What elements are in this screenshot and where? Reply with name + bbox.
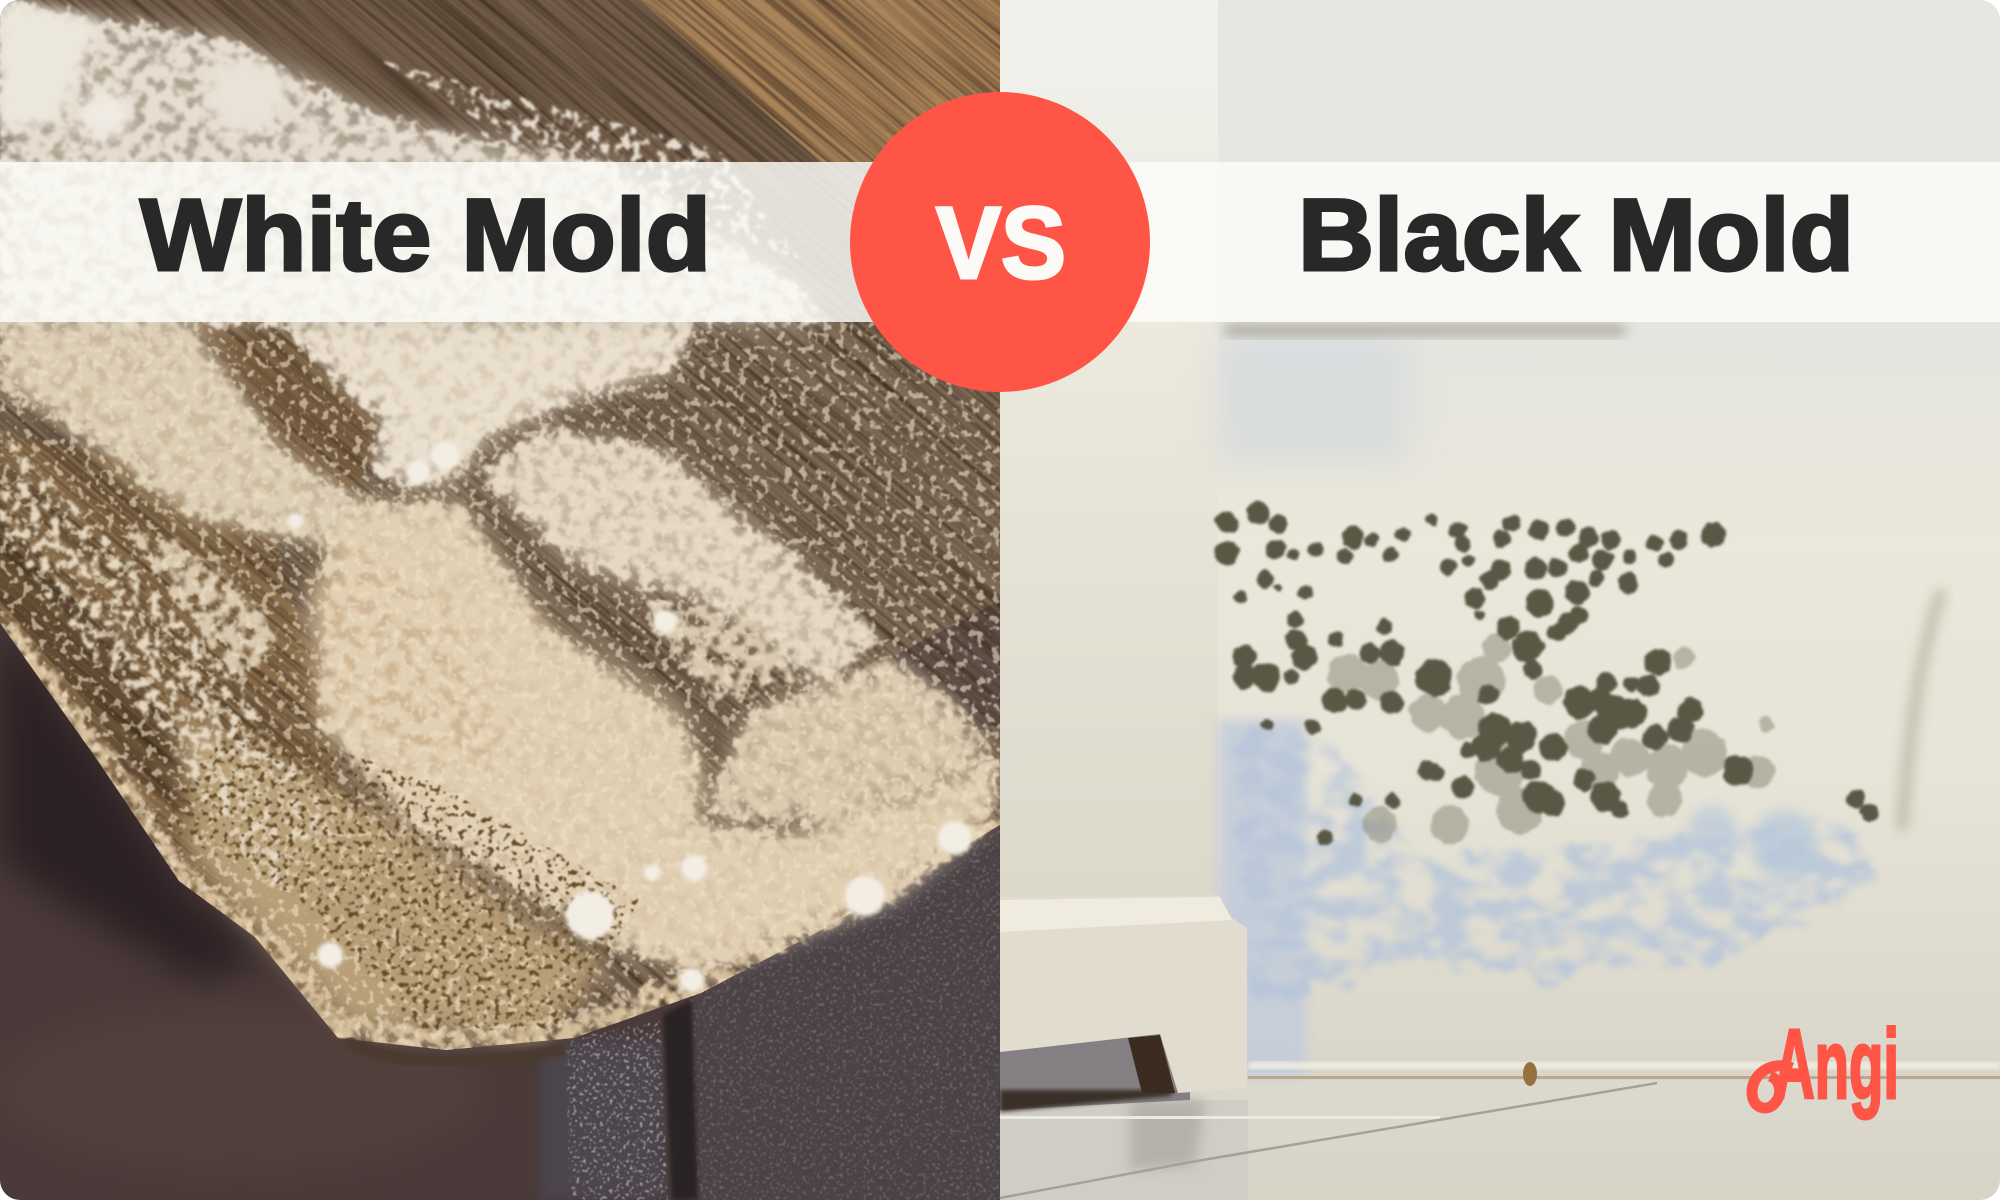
wood board [0,0,1000,1100]
wall [1218,0,2000,1080]
upper left speckled mold [0,320,357,679]
heading: Black Mold: Black Mold [1298,178,1854,292]
brick floor [0,623,1000,1200]
mold crust [0,320,1000,1062]
white mold lumps [287,441,972,992]
gap under baseboard [1000,1030,1190,1112]
white mold cluster by board joint [281,320,695,488]
soft base tones of the mold [0,320,995,1038]
black mold blots [1216,503,1878,844]
Angi logo: Angi [1774,1009,1899,1119]
Angi logo [1752,1009,1899,1119]
bottom rim of mold [0,627,1000,1045]
panel: white mold photo [0,0,1000,1200]
right title band [1127,162,2000,322]
upper right cream clusters [478,427,1000,825]
baseboard [1000,895,1247,1093]
floor [1000,1080,2000,1200]
vs badge: VS [936,186,1066,300]
central cream mass [319,499,1000,976]
panel: black mold photo [1000,0,2000,1200]
dark stains and streaks [1225,324,2000,1086]
blue stains on wall [1218,335,1880,1078]
vs badge [850,92,1150,392]
shadow under board [345,1040,565,1063]
heading: White Mold: White Mold [140,178,711,292]
fine speckle [0,322,1000,1062]
left title band [0,162,874,322]
door frame [1000,0,1218,900]
upper board white mold [0,0,830,322]
